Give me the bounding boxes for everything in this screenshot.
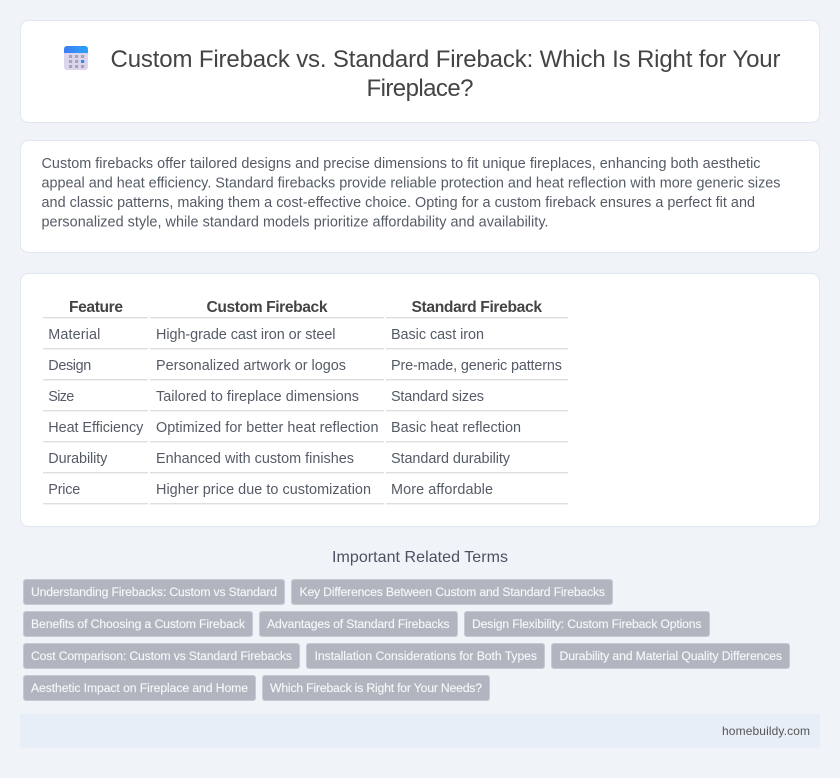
table rules <box>43 317 568 504</box>
row: heat efficiency: Heat Efficiency <box>48 420 144 436</box>
icon: calendar <box>64 46 88 70</box>
tag: Design Flexibility: Custom Fireback Options <box>472 617 702 631</box>
row: price <box>48 482 493 498</box>
panel: title header <box>20 20 820 122</box>
row: design <box>48 358 562 374</box>
panel: summary paragraph: and classic patterns, making them a cost-effective choice. Opting for a custom fireback ensures a perfect fit and <box>42 195 755 211</box>
tag <box>24 644 300 668</box>
row: durability: Standard durability <box>391 451 511 467</box>
panel: comparison table <box>20 274 820 526</box>
table header row: Standard Fireback <box>412 299 542 316</box>
row: material: Material <box>48 327 100 343</box>
panel: summary paragraph: appeal and heat efficiency. Standard firebacks provide reliable protection and heat reflection with more generic sizes <box>42 176 780 192</box>
table header row: Feature <box>69 299 123 316</box>
row: price: More affordable <box>391 482 493 498</box>
tag <box>292 580 612 604</box>
tag <box>24 612 252 636</box>
row: material <box>48 327 484 343</box>
title: Custom Fireback vs. Standard Fireback: Which Is Right for Your <box>110 46 780 73</box>
tag <box>260 612 458 636</box>
table header row <box>69 299 542 316</box>
row: design: Design <box>48 358 91 374</box>
tag <box>24 676 256 700</box>
panel: summary paragraph: personalized style, while standard models prioritize affordability and availability. <box>42 214 548 230</box>
tag: Key Differences Between Custom and Standard Firebacks <box>300 585 605 599</box>
row: heat efficiency <box>48 420 521 436</box>
title: Fireplace? <box>366 75 474 102</box>
tag <box>464 612 710 636</box>
row: durability: Durability <box>48 451 108 467</box>
row: durability <box>48 451 511 467</box>
row: size: Tailored to fireplace dimensions <box>156 389 359 405</box>
tag: Durability and Material Quality Differences <box>560 649 782 663</box>
row: material: Basic cast iron <box>391 327 484 343</box>
row: price: Higher price due to customization <box>156 482 371 498</box>
row: design: Pre-made, generic patterns <box>391 358 562 374</box>
tag <box>262 676 490 700</box>
heading: important related terms: Important Related Terms <box>332 549 508 566</box>
title <box>110 46 780 102</box>
row: heat efficiency: Optimized for better heat reflection <box>156 420 378 436</box>
tag: Cost Comparison: Custom vs Standard Firebacks <box>31 649 292 663</box>
panel: summary paragraph: Custom firebacks offer tailored designs and precise dimensions to fit unique fireplaces, enhancing both aesthetic <box>42 156 760 172</box>
table header row: Custom Fireback <box>206 299 328 316</box>
tag: Aesthetic Impact on Fireplace and Home <box>31 681 248 695</box>
tag: Understanding Firebacks: Custom vs Standard <box>31 585 277 599</box>
tag: Which Fireback is Right for Your Needs? <box>270 681 482 695</box>
panel: summary paragraph <box>20 140 820 252</box>
row: size: Standard sizes <box>391 389 484 405</box>
row: durability: Enhanced with custom finishes <box>156 451 354 467</box>
footer: homebuildy.com <box>722 724 810 738</box>
tag <box>552 644 790 668</box>
related terms tags <box>24 580 790 700</box>
row: design: Personalized artwork or logos <box>156 358 346 374</box>
tag: Advantages of Standard Firebacks <box>267 617 450 631</box>
tag <box>24 580 284 604</box>
row: material: High-grade cast iron or steel <box>156 327 336 343</box>
tag: Installation Considerations for Both Types <box>314 649 537 663</box>
row: price: Price <box>48 482 80 498</box>
row: size: Size <box>48 389 74 405</box>
row: heat efficiency: Basic heat reflection <box>391 420 521 436</box>
row: size <box>48 389 484 405</box>
tag: Benefits of Choosing a Custom Fireback <box>31 617 246 631</box>
tag <box>306 644 544 668</box>
footer <box>20 714 820 748</box>
